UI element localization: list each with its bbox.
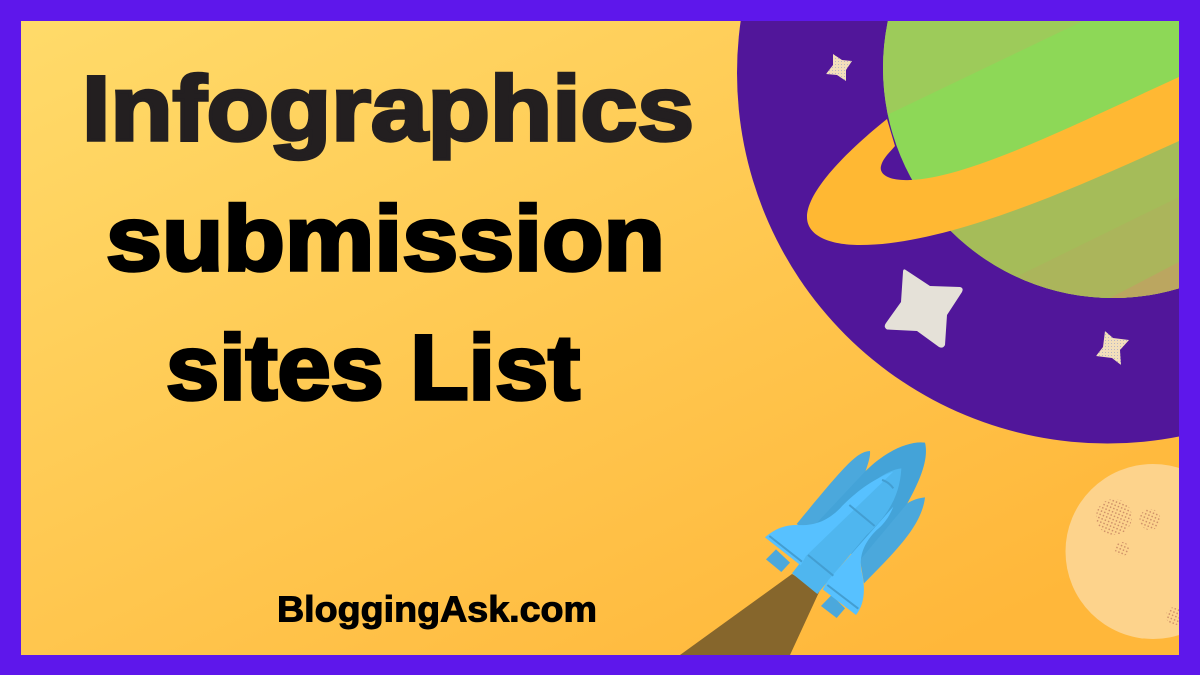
website label: BloggingAsk.com [277,588,597,630]
title line 1: Infographics [82,58,694,160]
title line 2: submission [106,188,665,290]
rocket orbiter body [792,468,901,594]
rocket left wing [765,472,893,565]
purple space circle [737,0,1200,444]
title [82,58,694,419]
planet ring [807,77,1179,245]
green planet [880,21,1180,310]
star: small right [1096,331,1129,365]
rocket flame [680,574,820,655]
rocket [765,442,926,618]
star: large [885,269,963,348]
rocket main tank [813,442,926,560]
rocket right wing [823,507,893,615]
star: small top [826,54,852,81]
rocket boosters [766,451,925,618]
title line 3: sites List [166,317,580,419]
rocket detail lines [769,480,893,609]
moon craters [1096,499,1184,625]
moon [1066,464,1179,639]
